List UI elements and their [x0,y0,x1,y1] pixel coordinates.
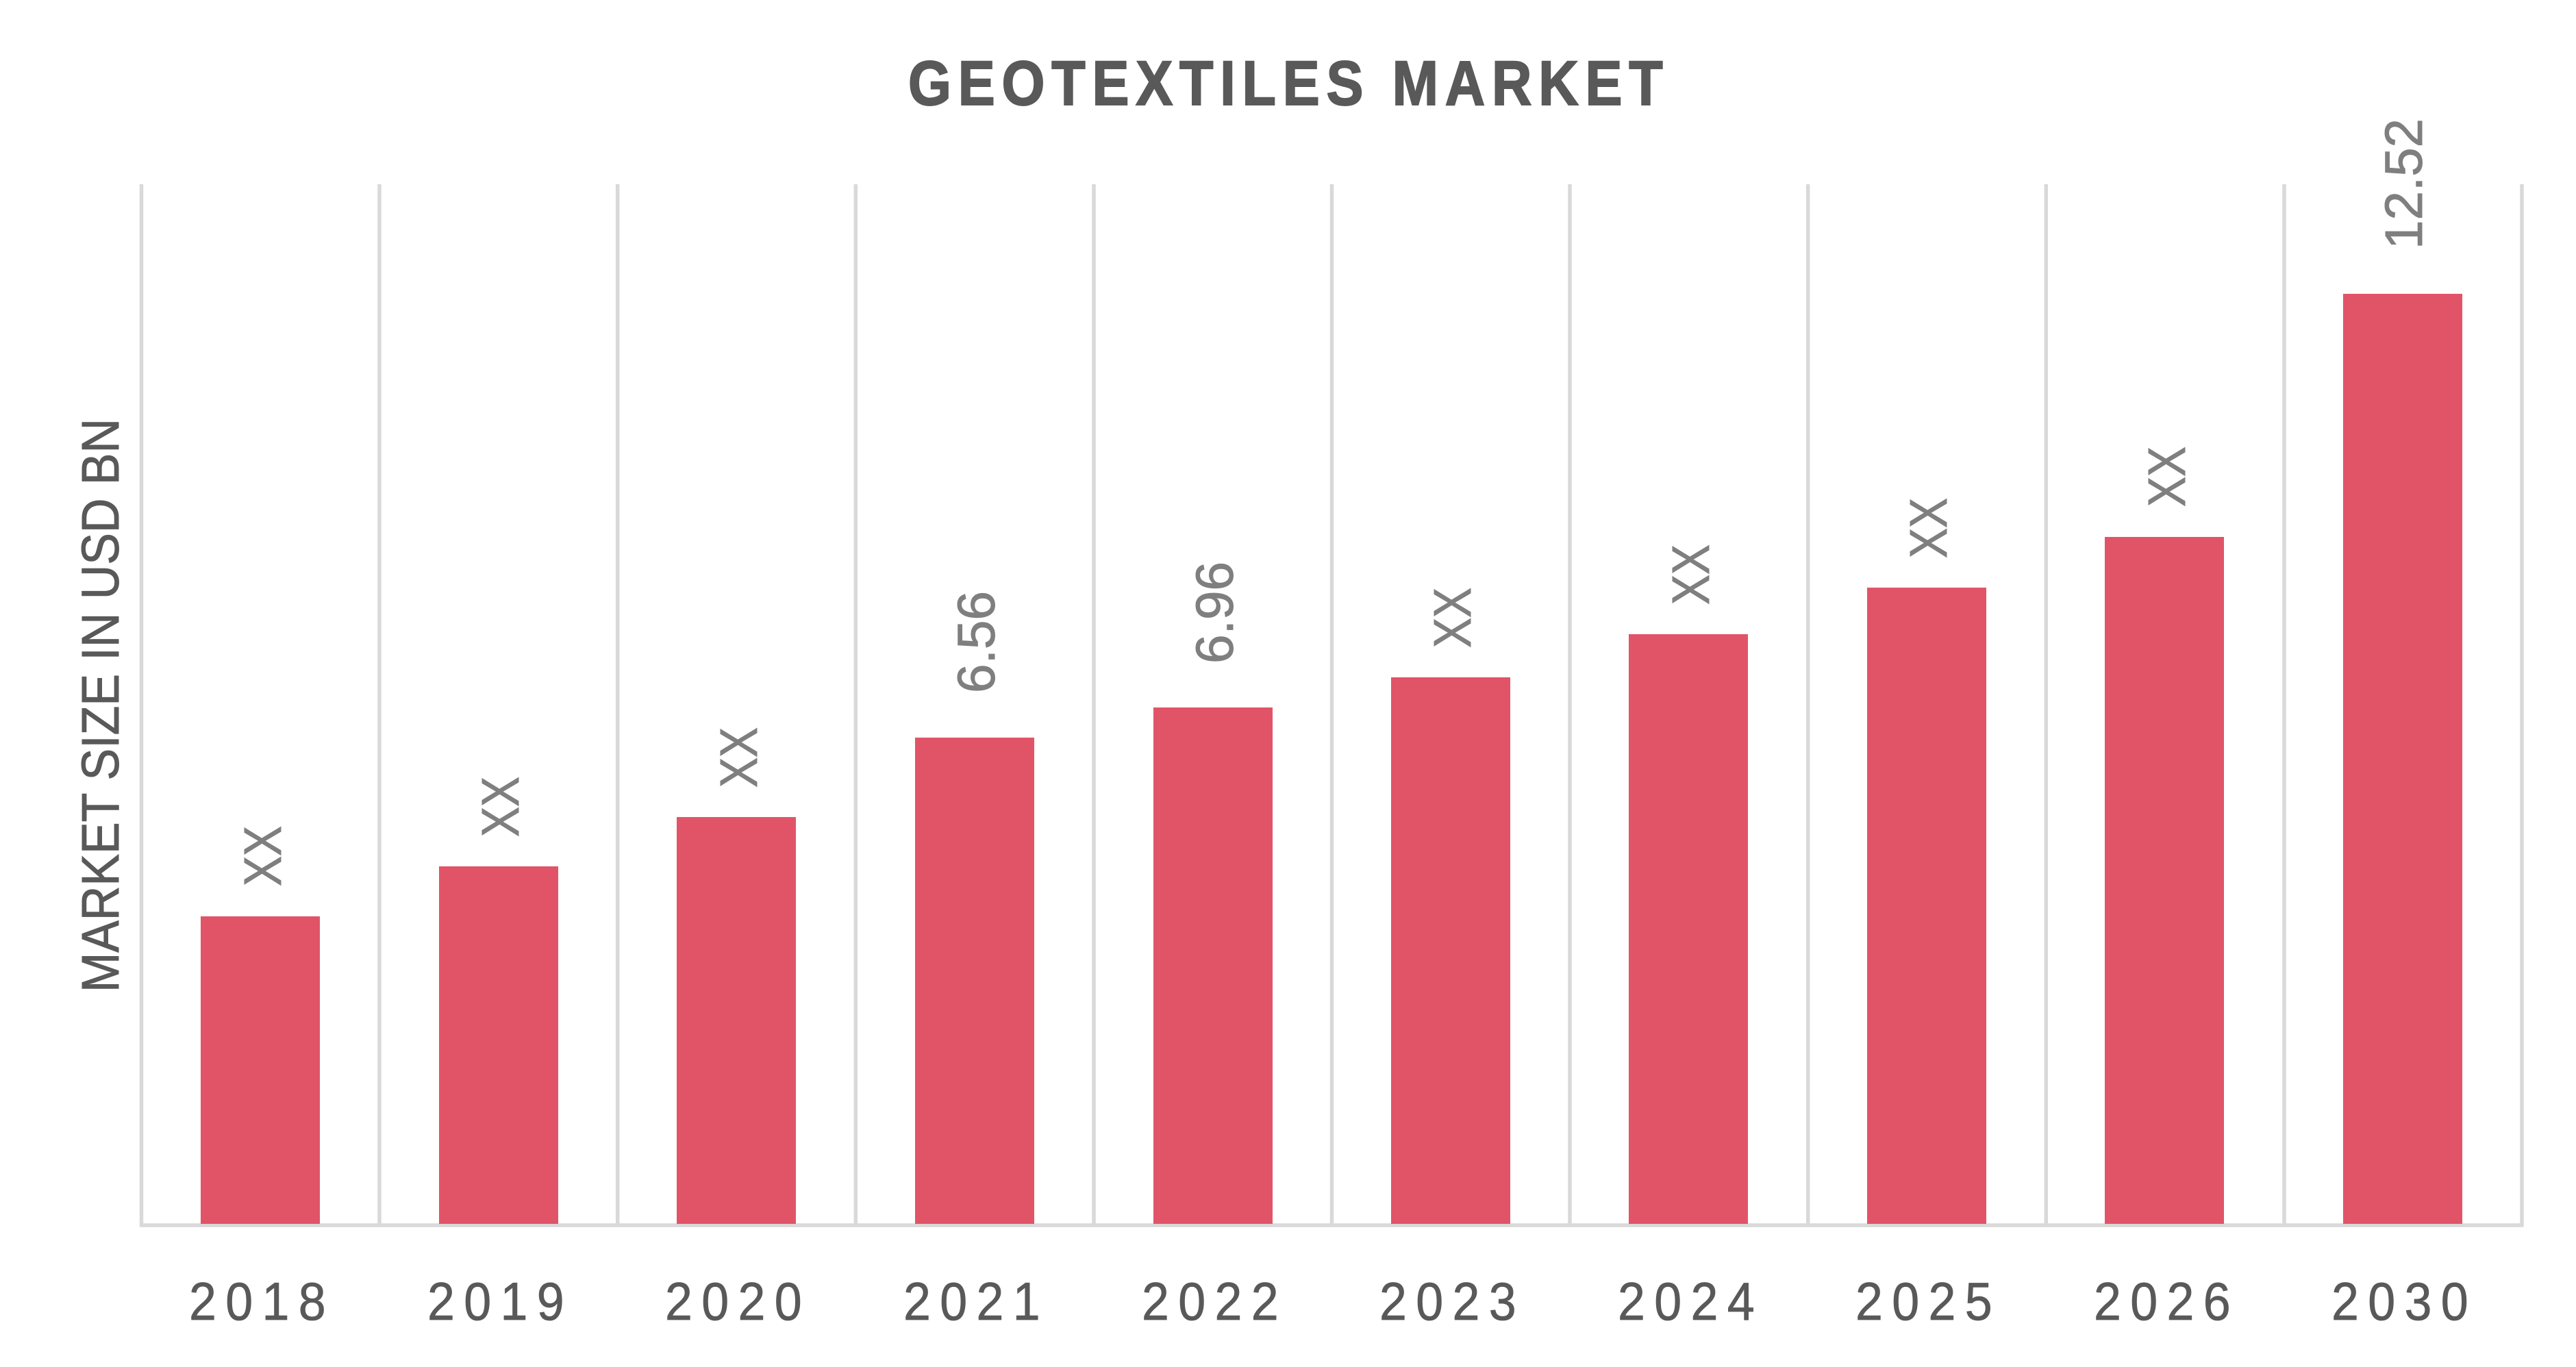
year: 2019: 2019 [427,1271,564,1331]
y-axis title: MARKET SIZE IN USD BN [71,418,130,992]
value label: 2025: XX [1899,498,1958,558]
data labels [234,118,2434,886]
x-axis year labels [189,1271,2468,1331]
bar: 2020 [677,817,796,1224]
value label: 2021: 6.56 [947,591,1006,693]
year: 2018: 2018 [189,1271,326,1331]
year: 2021: 2021 [903,1271,1040,1331]
bar: 2022 [1153,707,1273,1224]
value label: 2030: 12.52 [2375,118,2434,249]
year: 2023: 2023 [1379,1271,1516,1331]
bar: 2019 [439,866,558,1224]
year: 2024: 2024 [1618,1271,1755,1331]
year: 2020: 2020 [665,1271,802,1331]
year: 2022: 2022 [1142,1271,1279,1331]
bar: 2021 [915,738,1034,1224]
value label: 2019: XX [471,777,530,837]
bar: 2023 [1391,677,1510,1224]
value label: 2018: XX [234,826,292,886]
bar: 2030 [2343,294,2462,1224]
value label: 2023: XX [1423,588,1482,648]
bar: 2025 [1867,588,1986,1224]
title: GEOTEXTILES MARKET [908,49,1663,118]
value label: 2024: XX [1662,544,1721,605]
value label: 2026: XX [2138,447,2197,507]
year: 2030: 2030 [2331,1271,2468,1331]
bar: 2026 [2105,537,2224,1224]
value label: 2020: XX [710,727,768,788]
bars [201,294,2462,1224]
value label: 2022: 6.96 [1186,562,1245,664]
bar: 2024 [1629,634,1748,1224]
year: 2025: 2025 [1855,1271,1992,1331]
year: 2026: 2026 [2094,1271,2231,1331]
bar: 2018 [201,916,320,1224]
